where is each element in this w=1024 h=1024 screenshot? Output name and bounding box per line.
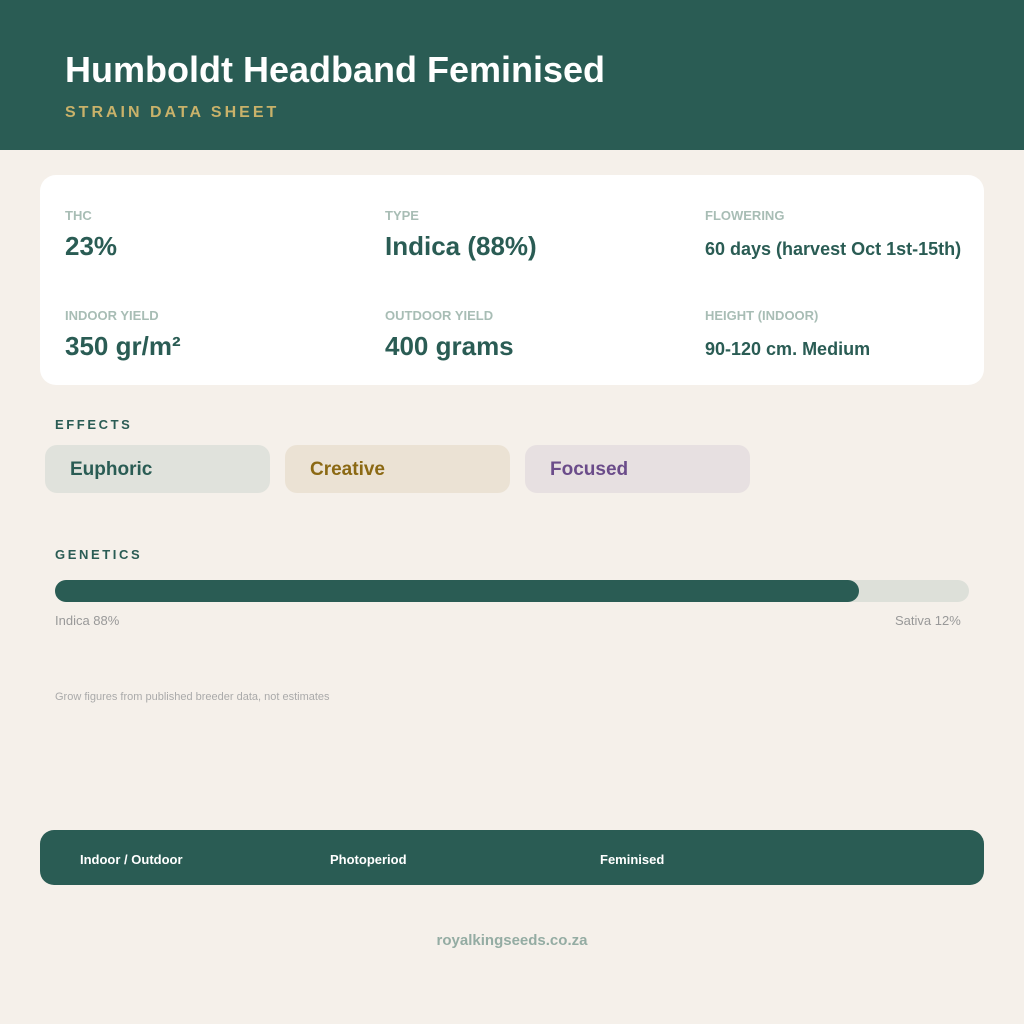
effect pill: euphoric <box>45 445 270 493</box>
stat: indoor yield: 350 gr/m² <box>65 331 181 361</box>
attribute: seed type: Feminised <box>600 852 664 867</box>
genetics bar <box>55 580 969 602</box>
stat: THC: THC <box>65 208 92 223</box>
stat: flowering: FLOWERING <box>705 208 784 223</box>
subtitle: STRAIN DATA SHEET <box>65 104 279 121</box>
footnote: Grow figures from published breeder data, not estimates <box>55 691 330 703</box>
attribute bar <box>40 830 984 885</box>
effect pill: focused: Focused <box>550 459 628 480</box>
stat: THC <box>65 208 117 261</box>
attribute: grow environment: Indoor / Outdoor <box>80 852 183 867</box>
genetics heading: GENETICS <box>55 547 142 562</box>
stat: flowering <box>705 208 961 259</box>
stat: outdoor yield: 400 grams <box>385 331 514 361</box>
effects heading: EFFECTS <box>55 417 132 432</box>
header band <box>0 0 1024 150</box>
stat: height <box>705 308 870 359</box>
stat: indoor yield <box>65 308 181 361</box>
stat: THC: 23% <box>65 231 117 261</box>
stat: outdoor yield <box>385 308 514 361</box>
sativa label: Sativa 12% <box>895 613 961 628</box>
stat: type <box>385 208 537 261</box>
attribute: photoperiod: Photoperiod <box>330 852 407 867</box>
panel: strain stats <box>40 175 984 385</box>
website: royalkingseeds.co.za <box>437 932 587 949</box>
stat: type: Indica (88%) <box>385 231 537 261</box>
effect pill: creative: Creative <box>310 459 385 480</box>
stat: outdoor yield: OUTDOOR YIELD <box>385 308 493 323</box>
effect pill: euphoric: Euphoric <box>70 459 152 480</box>
stat: type: TYPE <box>385 208 419 223</box>
effect pill: creative <box>285 445 510 493</box>
indica share <box>55 580 859 602</box>
indica label: Indica 88% <box>55 613 119 628</box>
title: Humboldt Headband Feminised <box>65 49 605 90</box>
effect pill: focused <box>525 445 750 493</box>
stat: height: HEIGHT (INDOOR) <box>705 308 818 323</box>
stat: height: 90-120 cm. Medium <box>705 339 870 359</box>
stat: indoor yield: INDOOR YIELD <box>65 308 159 323</box>
stat: flowering: 60 days (harvest Oct 1st-15th) <box>705 239 961 259</box>
